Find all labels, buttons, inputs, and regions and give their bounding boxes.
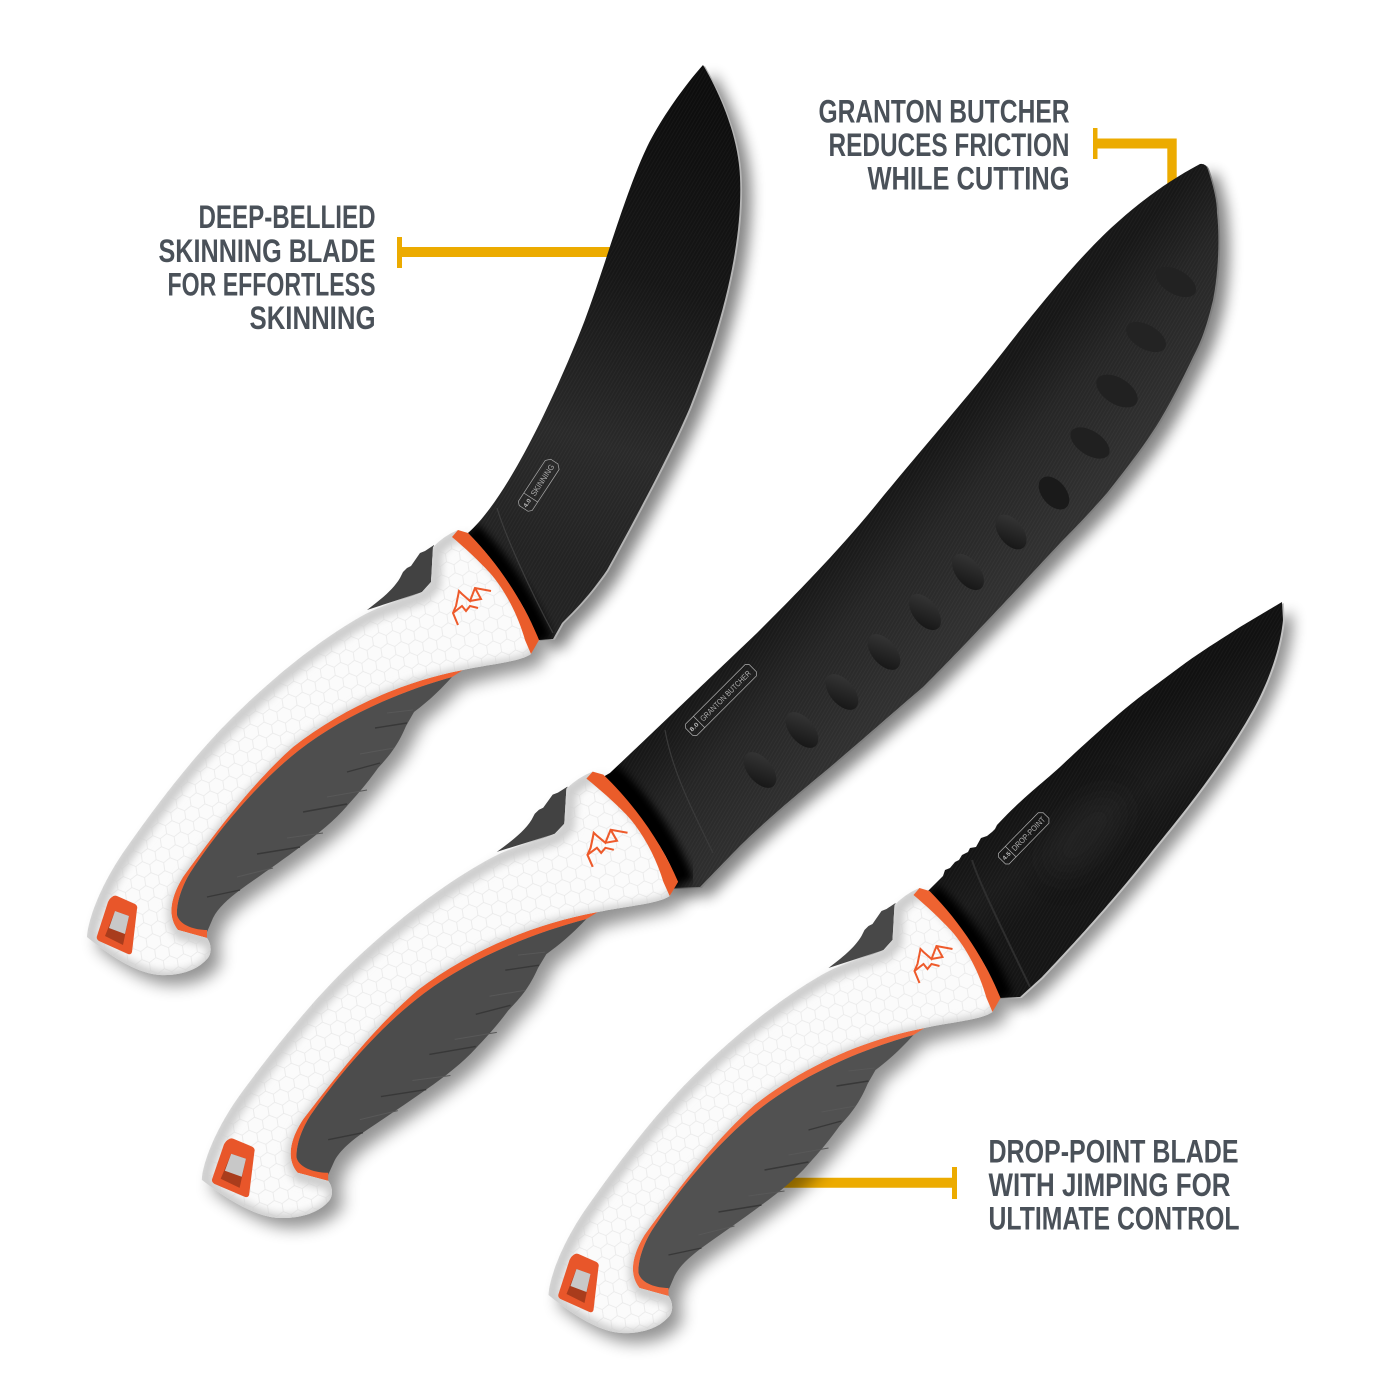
- granton scallops: [737, 261, 1201, 794]
- leader line: [397, 237, 620, 268]
- blade stamp: [997, 810, 1051, 866]
- blade: [926, 602, 1283, 998]
- callout text: SKINNING: [250, 300, 376, 336]
- orange piping: [171, 670, 463, 938]
- knife 3: drop-point: [548, 602, 1293, 1343]
- blade stamp: 4.0: [523, 498, 533, 509]
- blade stamp: 4.5: [1002, 851, 1013, 862]
- white body: [202, 772, 677, 1218]
- callout text: DEEP-BELLIED: [198, 199, 376, 235]
- callout text: WITH JIMPING FOR: [988, 1167, 1230, 1203]
- grip ridges: [207, 710, 413, 897]
- rubber grip: [638, 1035, 914, 1290]
- callout text: SKINNING BLADE: [158, 233, 376, 269]
- bolster wedge: [367, 545, 434, 610]
- honeycomb texture: [202, 772, 677, 1218]
- callout text: DROP-POINT BLADE: [988, 1134, 1238, 1170]
- blade stamp: [517, 457, 561, 513]
- callout text: GRANTON BUTCHER: [818, 94, 1070, 130]
- callout: granton butcher: [818, 94, 1177, 200]
- leader line: [770, 1167, 957, 1199]
- orange ferrule: [586, 772, 678, 896]
- callout text: REDUCES FRICTION: [828, 127, 1070, 163]
- plunge shade: [603, 775, 678, 885]
- orange ferrule: [914, 888, 1000, 1012]
- logo: [587, 830, 628, 867]
- lanyard hole: [558, 1254, 599, 1312]
- blade shadow: [936, 611, 1293, 1007]
- blade stamp: 8.0: [689, 721, 701, 733]
- orange piping: [633, 1028, 924, 1296]
- edge shading: [90, 533, 541, 978]
- edge shading: [552, 891, 1002, 1336]
- blade edge: [600, 165, 1220, 889]
- blade: [598, 164, 1218, 888]
- callout: drop-point blade: [770, 1134, 1240, 1236]
- blade stamp: GRANTON BUTCHER: [698, 669, 753, 723]
- bolster wedge: [497, 787, 567, 852]
- bolster wedge: [828, 903, 896, 968]
- brushed finish: [468, 65, 740, 640]
- honeycomb texture: [87, 530, 538, 975]
- plunge shade: [468, 533, 540, 642]
- mottled highlight: [1035, 783, 1135, 887]
- leader line: [1093, 128, 1177, 200]
- rubber grip: [177, 677, 452, 932]
- brushed finish: [598, 164, 1218, 888]
- blade stamp: SKINNING: [529, 463, 556, 498]
- honeycomb texture: [548, 888, 1000, 1333]
- brushed finish: [926, 602, 1283, 998]
- blade stamp: [684, 663, 758, 737]
- callout: deep-bellied skinning blade: [158, 199, 620, 336]
- plunge line: [497, 508, 553, 633]
- blade: [468, 65, 740, 640]
- handle: [202, 772, 688, 1228]
- callout text: WHILE CUTTING: [868, 161, 1070, 197]
- knife 1: skinning: [87, 65, 751, 985]
- blade stamp: DROP-POINT: [1010, 815, 1047, 853]
- handle shadow: [212, 782, 688, 1228]
- blade edge: [470, 66, 742, 641]
- blade shadow: [479, 74, 751, 649]
- handle: [548, 888, 1010, 1343]
- plunge line: [665, 730, 713, 853]
- grip ridges: [668, 1068, 874, 1255]
- callout text: ULTIMATE CONTROL: [988, 1200, 1240, 1236]
- white body: [87, 530, 538, 975]
- blade shadow: [609, 173, 1229, 897]
- orange piping: [291, 912, 598, 1181]
- logo: [914, 946, 952, 983]
- orange ferrule: [452, 530, 539, 654]
- blade edge: [928, 603, 1285, 999]
- callout text: FOR EFFORTLESS: [168, 266, 376, 302]
- plunge line: [972, 860, 1030, 987]
- handle: [87, 530, 548, 985]
- lanyard hole: [212, 1138, 255, 1197]
- edge shading: [205, 775, 680, 1221]
- logo: [453, 588, 491, 625]
- handle shadow: [558, 898, 1010, 1343]
- grip ridges: [328, 952, 545, 1140]
- knife 2: granton butcher: [202, 164, 1229, 1228]
- lanyard hole: [97, 896, 137, 954]
- rubber grip: [296, 919, 586, 1175]
- plunge shade: [930, 893, 1002, 998]
- white body: [548, 888, 1000, 1333]
- handle shadow: [97, 540, 548, 985]
